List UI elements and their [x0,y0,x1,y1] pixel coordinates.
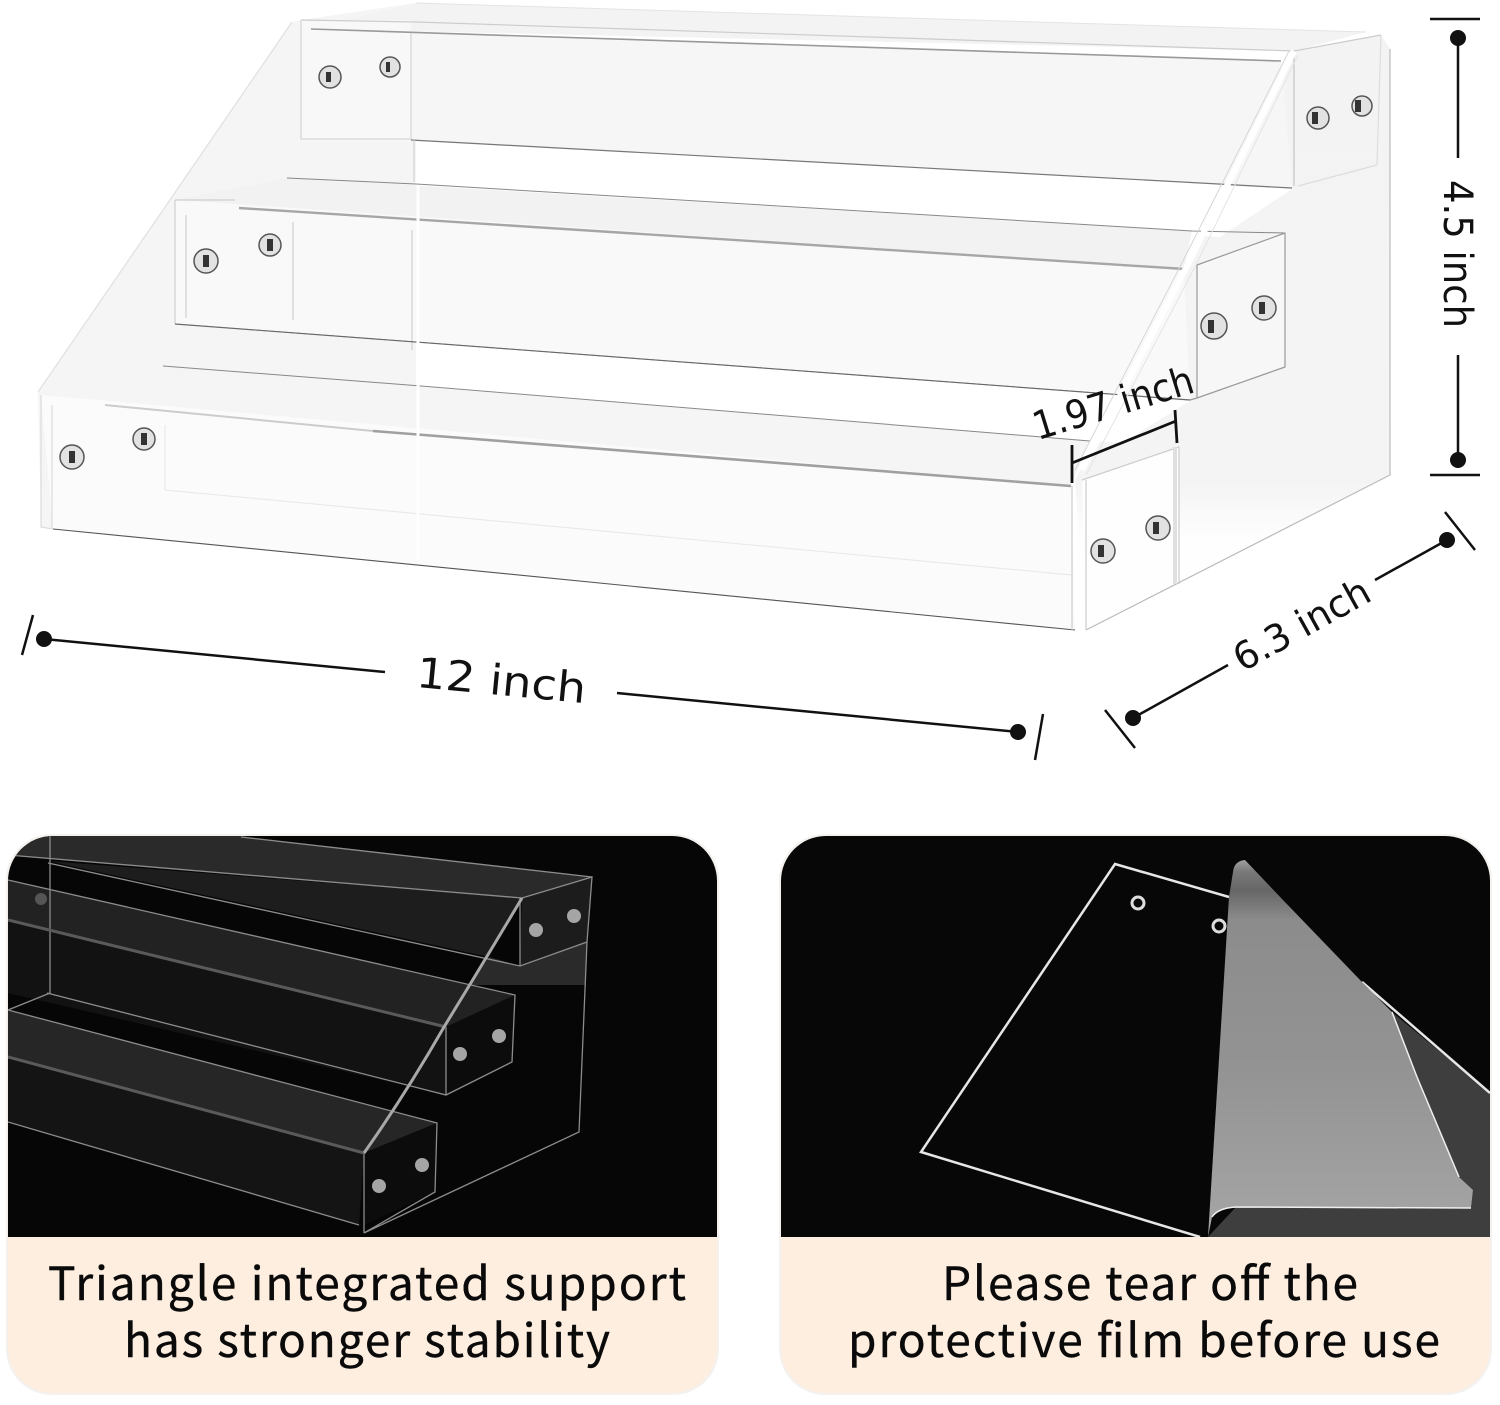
dimension: depth 6.3 inch [1105,512,1475,748]
side supports [38,22,1298,475]
caption text: has stronger stability [124,1305,610,1371]
caption band [781,1237,1490,1393]
dimension: depth 6.3 inch: 6.3 inch [1225,569,1378,680]
right support plate [1075,35,1390,630]
shadowed plate behind film [1208,1012,1490,1237]
caption text: protective film before use [848,1305,1440,1371]
dimension: width 12 inch [22,615,1043,760]
middle tier [175,178,1285,400]
caption text: Triangle integrated support [48,1248,686,1314]
caption text [848,1248,1440,1371]
dimension: width 12 inch: 12 inch [414,648,588,713]
panel: triangle support [6,834,719,1395]
caption text [48,1248,686,1371]
film sheet [1208,860,1473,1237]
panel: protective film [779,834,1492,1395]
white gap under middle tier [416,351,1190,443]
photo: plate with peeled film [781,836,1490,1237]
dimension: shelf depth 1.97 inch [1027,358,1199,483]
bottom tier [41,49,1390,630]
left support plate [38,3,416,560]
product: three-tier clear acrylic shelf [38,3,1390,630]
caption text: Please tear off the [942,1248,1358,1314]
caption band [8,1237,717,1393]
white gap under top tier [416,148,1292,237]
dimension: height 4.5 inch: 4.5 inch [1434,180,1480,328]
screws [60,57,1372,563]
photo: black background with shelf [8,836,717,1237]
dimension: shelf depth 1.97 inch: 1.97 inch [1027,358,1199,450]
screws [35,893,581,1193]
plate holes [1132,897,1225,932]
top tier [301,3,1381,188]
plate outline [921,864,1229,1237]
dimension: height 4.5 inch [1430,19,1480,475]
